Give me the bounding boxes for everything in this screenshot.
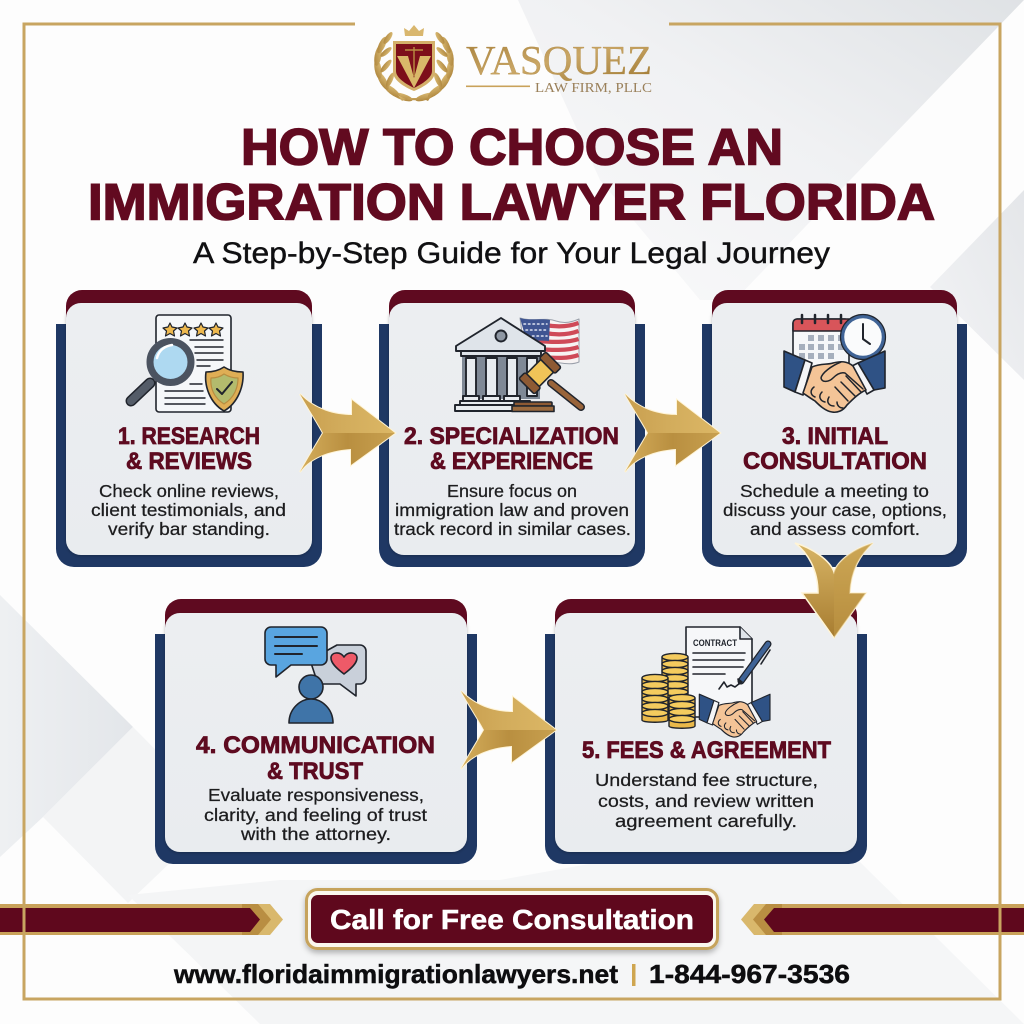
logo subtitle: LAW FIRM, PLLC [535, 80, 652, 95]
call to action button [306, 890, 718, 948]
arrow: step 4 to step 5 [461, 691, 556, 769]
icon: shield [393, 41, 435, 91]
logo rule [466, 86, 530, 87]
panel: step 1 research and reviews [56, 290, 322, 567]
bottom ribbon left [0, 904, 283, 935]
contact line: 1-844-967-3536 [649, 959, 850, 989]
body text: agreement carefully. [615, 811, 797, 831]
heading [196, 732, 435, 785]
panel: step 3 initial consultation [702, 290, 967, 567]
heading: 3. INITIAL [782, 423, 888, 450]
title [88, 118, 935, 230]
body text: Understand fee structure, [595, 770, 818, 790]
icon: laurel wreath [373, 31, 455, 103]
heading: 4. COMMUNICATION [196, 732, 435, 759]
body text: clarity, and feeling of trust [204, 805, 427, 825]
body text: immigration law and proven [395, 500, 629, 520]
heading [743, 423, 927, 475]
body text [394, 481, 631, 539]
heading [118, 423, 260, 475]
body text: costs, and review written [598, 791, 814, 811]
heading: & EXPERIENCE [430, 448, 593, 475]
panel: step 4 communication and trust [155, 599, 477, 864]
body text [723, 481, 947, 539]
button label: Call for Free Consultation [330, 904, 694, 935]
icon: contract coins and handshake [642, 627, 770, 737]
heading: CONSULTATION [743, 448, 927, 475]
body text: Ensure focus on [447, 481, 577, 501]
icon: calendar clock and handshake [784, 314, 886, 412]
subtitle: A Step-by-Step Guide for Your Legal Journey [193, 237, 830, 270]
card frame [379, 290, 645, 567]
icon: contract coins and handshake: CONTRACT [693, 638, 737, 648]
contact line [173, 959, 850, 989]
body text: Schedule a meeting to [740, 481, 929, 501]
body text: Evaluate responsiveness, [208, 785, 424, 805]
arrow: step 2 to step 3 [625, 394, 720, 472]
card frame [56, 290, 322, 567]
body text [204, 785, 427, 844]
logo [373, 25, 652, 103]
heading [404, 423, 619, 475]
icon: crown [404, 25, 424, 36]
body text: track record in similar cases. [394, 519, 631, 539]
body text: verify bar standing. [108, 519, 270, 539]
title: HOW TO CHOOSE AN [241, 118, 783, 176]
icon: chat bubbles and person [265, 627, 366, 723]
panel: step 2 specialization and experience [379, 290, 645, 567]
heading: & REVIEWS [126, 448, 252, 475]
title: IMMIGRATION LAWYER FLORIDA [88, 174, 935, 230]
body text: and assess comfort. [750, 519, 920, 539]
body text: with the attorney. [240, 824, 391, 844]
bottom ribbon right [741, 904, 1024, 935]
card frame [702, 290, 967, 567]
panel: step 5 fees and agreement [545, 599, 867, 864]
body text: Check online reviews, [99, 481, 279, 501]
body text [91, 481, 286, 539]
body text: client testimonials, and [91, 500, 286, 520]
icon: document with magnifier and shield [131, 315, 243, 412]
arrow: step 1 to step 2 [300, 394, 395, 472]
heading: 5. FEES & AGREEMENT [582, 737, 831, 764]
card frame [545, 599, 867, 864]
card frame [155, 599, 477, 864]
body text [595, 770, 818, 831]
icon: courthouse flag and gavel [455, 318, 581, 412]
arrow: step 3 to step 5 [795, 543, 873, 638]
body text: discuss your case, options, [723, 500, 947, 520]
heading: 2. SPECIALIZATION [404, 423, 619, 450]
heading: 1. RESEARCH [118, 423, 260, 450]
heading: & TRUST [267, 758, 363, 785]
logo wordmark: VASQUEZ [466, 37, 652, 83]
contact line: www.floridaimmigrationlawyers.net [173, 959, 618, 989]
